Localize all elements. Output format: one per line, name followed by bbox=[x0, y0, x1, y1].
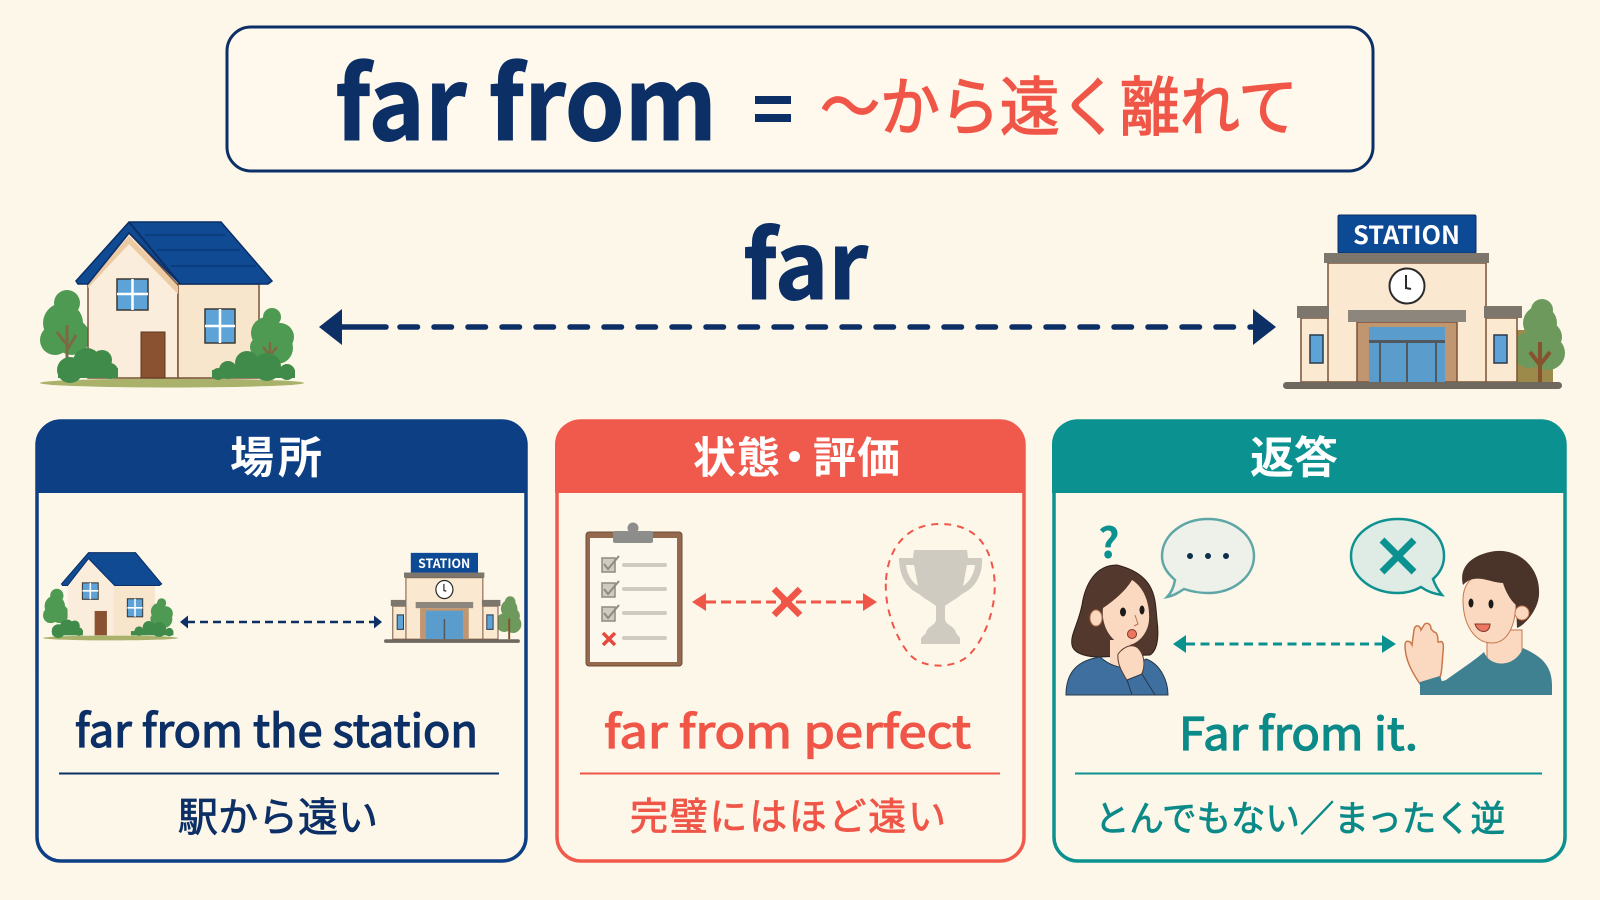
arrow: main double-headed dashed bbox=[319, 309, 1276, 345]
icon: small station bbox=[384, 552, 521, 643]
icon: small station: STATION bbox=[418, 552, 470, 572]
arrow: teal double-headed bbox=[1173, 635, 1396, 653]
icon: large house bbox=[40, 222, 304, 388]
translation: station: 駅から遠い bbox=[178, 785, 378, 843]
heading: far: far bbox=[743, 191, 868, 326]
arrow: crossed-out red double-headed bbox=[692, 589, 877, 615]
icon: faded trophy in dashed outline bbox=[886, 524, 995, 666]
icon: clipboard checklist bbox=[586, 522, 682, 666]
title: far from: far from bbox=[335, 24, 717, 169]
translation: perfect: 完璧にはほど遠い bbox=[630, 786, 946, 841]
icon: woman thinking bbox=[1066, 565, 1168, 695]
example: Far from it.: Far from it. bbox=[1179, 698, 1418, 763]
header text: state: 状態・評価 bbox=[693, 424, 900, 486]
header text: place: 場所 bbox=[230, 422, 322, 486]
header text: reply: 返答 bbox=[1250, 422, 1338, 486]
icon: large station bbox=[1283, 215, 1565, 389]
panel: reply bbox=[1052, 420, 1566, 861]
arrow: small navy double-headed bbox=[180, 616, 382, 628]
icon: man waving hand bbox=[1405, 551, 1552, 695]
example: far from perfect: far from perfect bbox=[604, 696, 971, 761]
example: far from the station: far from the station bbox=[75, 695, 478, 760]
title: Japanese meaning: ～から遠く離れて bbox=[820, 57, 1298, 149]
icon: question mark: ? bbox=[1098, 510, 1120, 571]
icon: speech bubble with cross bbox=[1351, 519, 1444, 595]
panel header: place bbox=[36, 420, 527, 493]
icon: small house bbox=[43, 553, 178, 640]
icon: speech bubble with dots bbox=[1162, 519, 1254, 597]
panel header: state bbox=[555, 420, 1025, 493]
icon: large station: STATION bbox=[1353, 216, 1460, 252]
panel: place bbox=[36, 420, 527, 861]
panel: state and evaluation bbox=[555, 420, 1025, 861]
translation: reply: とんでもない／まったく逆 bbox=[1095, 790, 1505, 842]
panel header: reply bbox=[1052, 420, 1566, 493]
equals sign bbox=[755, 96, 791, 122]
title box bbox=[227, 24, 1373, 171]
